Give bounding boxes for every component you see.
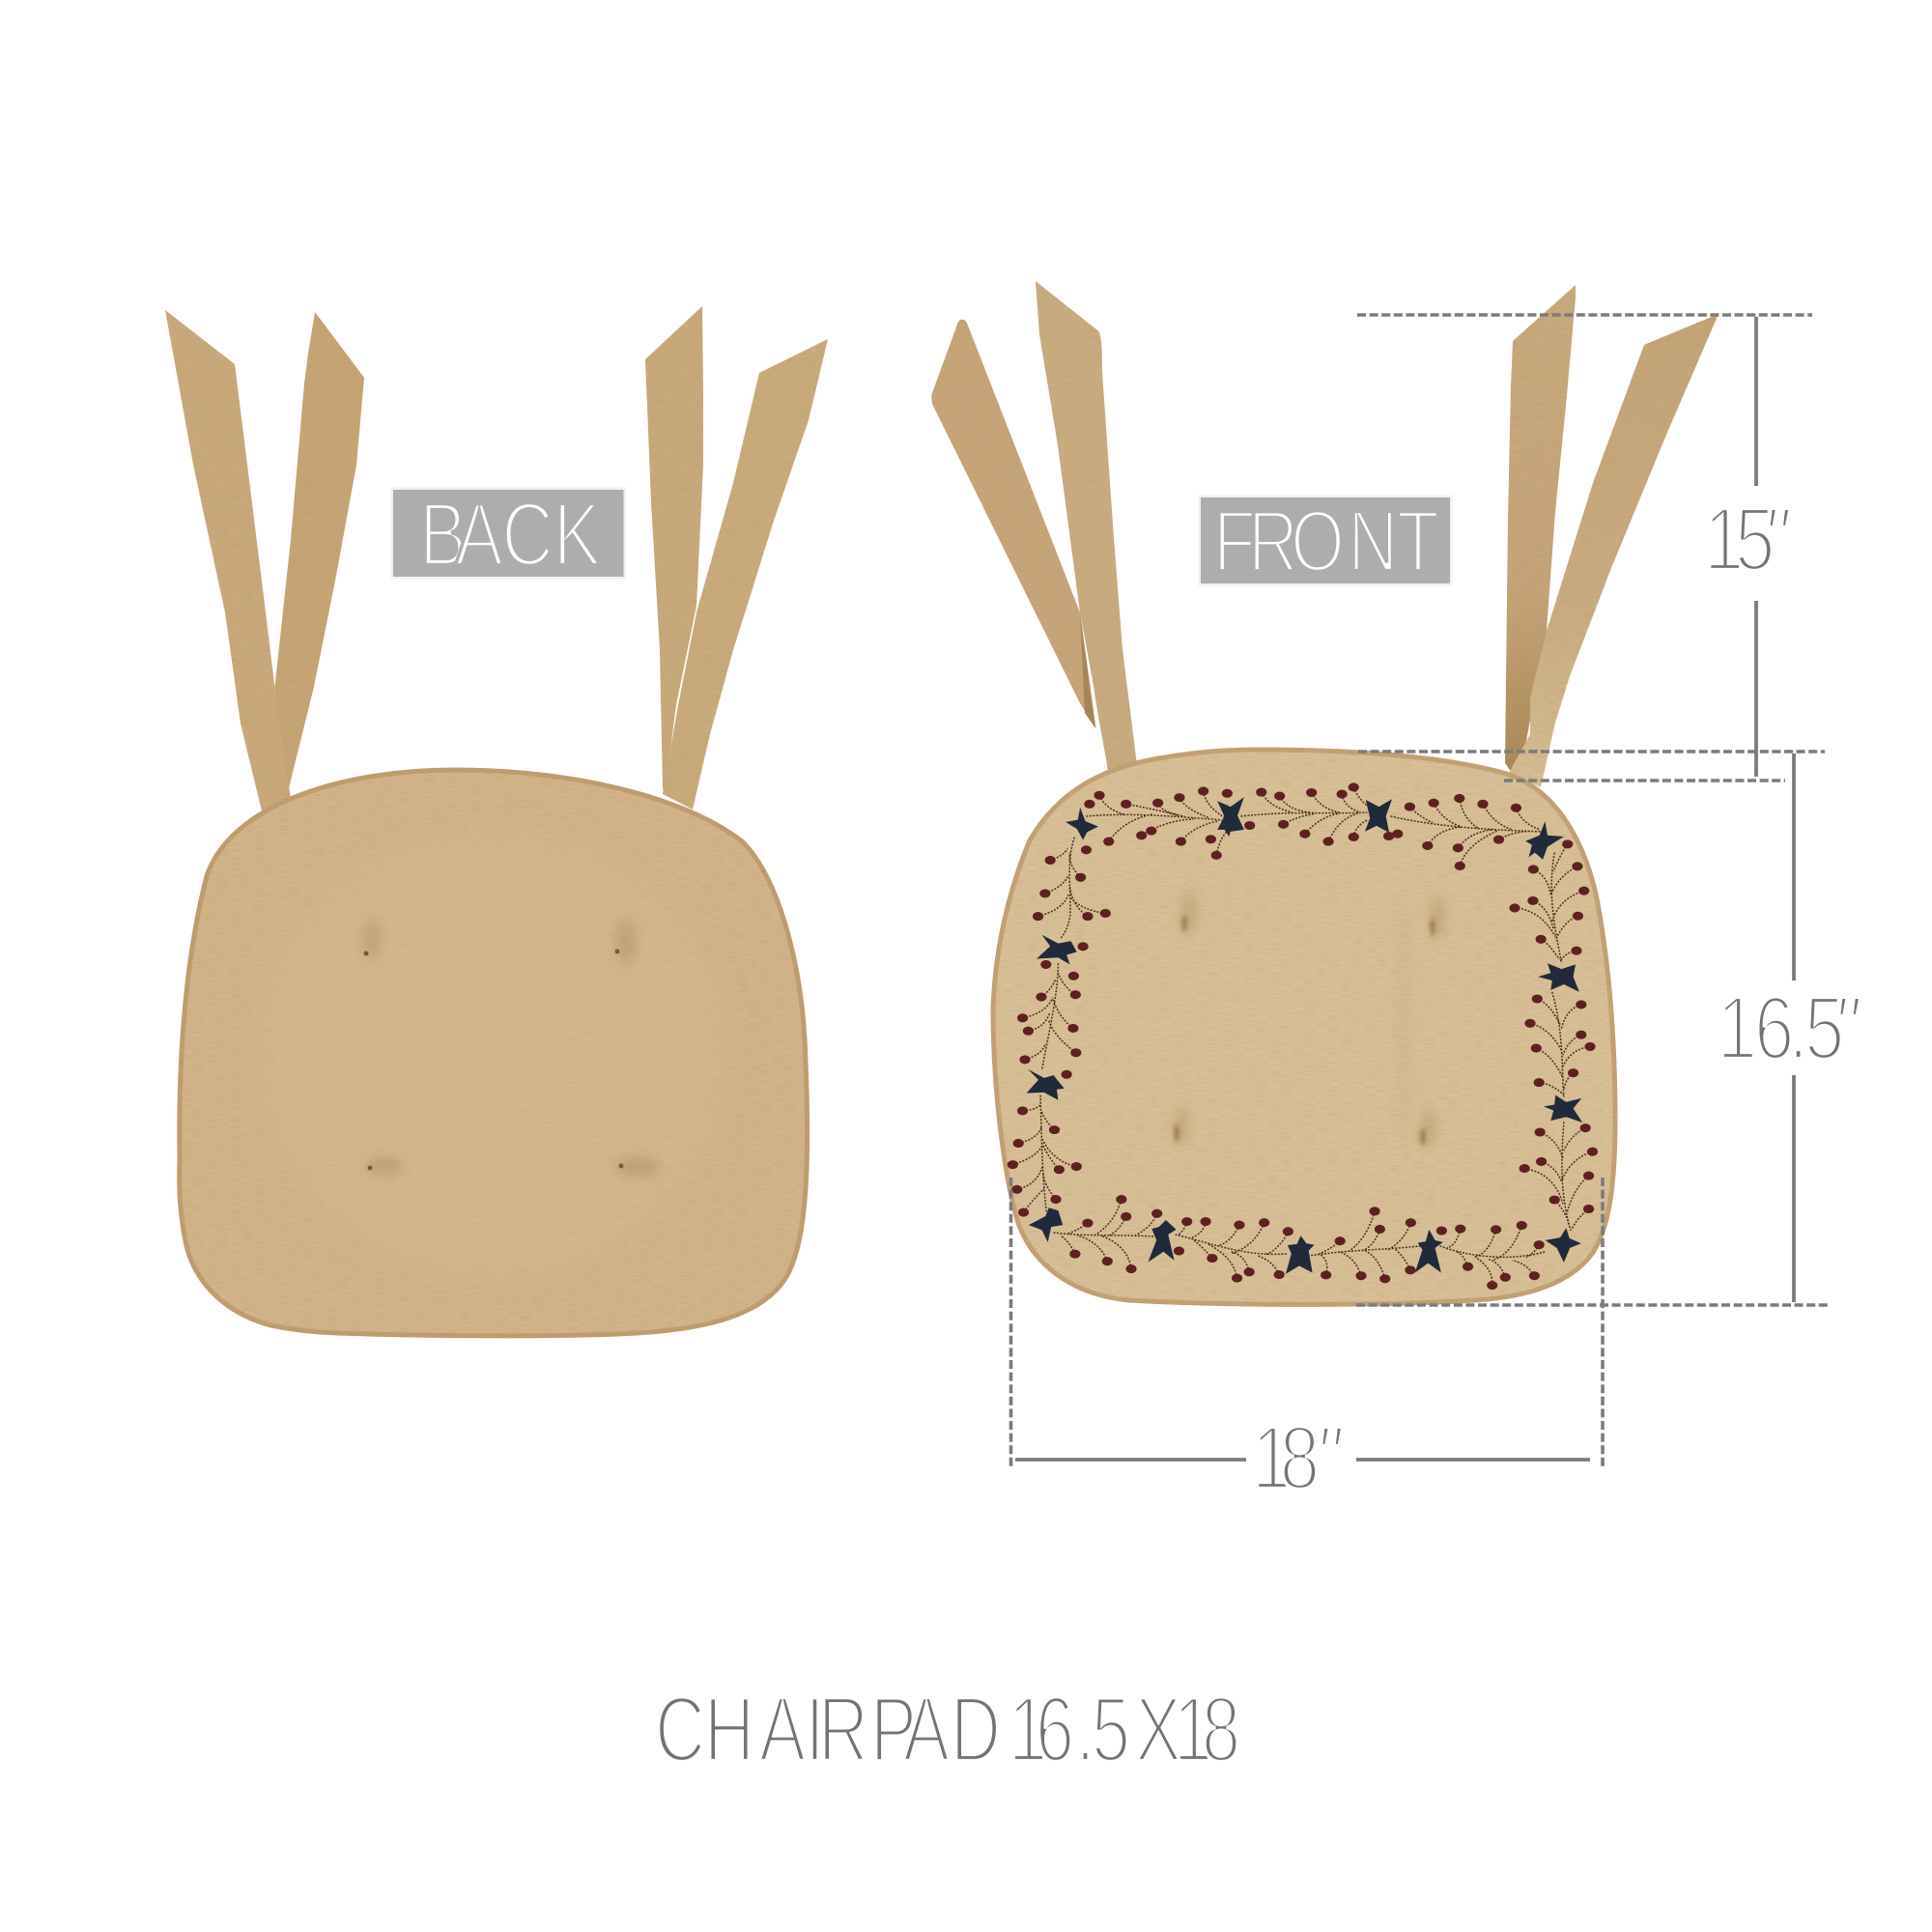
tie strap: front left pair bbox=[931, 281, 1138, 784]
tufts: back bbox=[363, 918, 661, 1177]
label: BACK: BACK bbox=[419, 484, 601, 584]
berries bbox=[1008, 782, 1598, 1290]
product photo: chair pad back bbox=[165, 306, 828, 1343]
dimension: 16.5 inch depth: 16.5" bbox=[1718, 978, 1861, 1078]
dimension: 18 inch width: 18" bbox=[1252, 1407, 1344, 1508]
stars bbox=[1026, 797, 1582, 1274]
tie strap: back far left pair bbox=[165, 310, 364, 823]
label: FRONT: FRONT bbox=[1213, 493, 1439, 590]
cushion: back bbox=[174, 763, 811, 1343]
product photo: chair pad front bbox=[931, 281, 1719, 1314]
vine stitching bbox=[1012, 787, 1592, 1286]
title: product size caption: CHAIR PAD 16.5X18 bbox=[655, 1677, 1240, 1780]
tie strap: back right pair bbox=[645, 306, 828, 810]
tufts: front bbox=[1175, 892, 1443, 1150]
cushion: front bbox=[985, 744, 1623, 1314]
tie strap: front right pair bbox=[1505, 285, 1719, 787]
embroidered border: berry vines and stars bbox=[1008, 782, 1598, 1290]
dimension: 15 inch strap length: 15" bbox=[1704, 489, 1791, 589]
piping: back bbox=[180, 770, 808, 1336]
piping: front bbox=[993, 750, 1615, 1304]
